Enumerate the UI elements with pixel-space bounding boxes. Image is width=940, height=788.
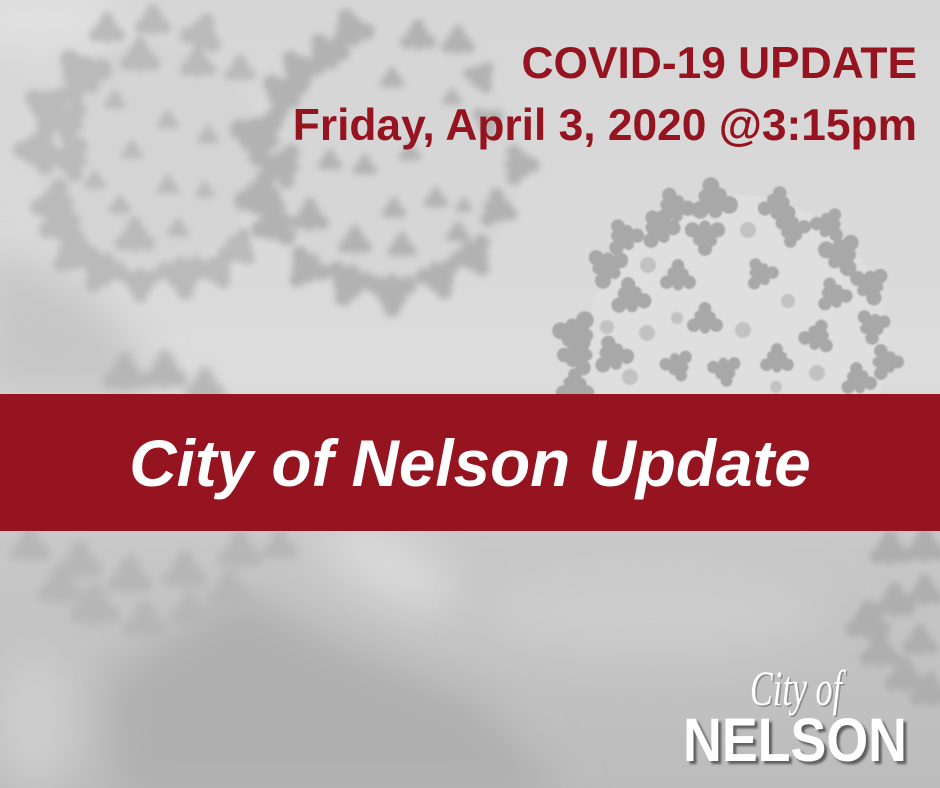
- banner: City of Nelson Update: [0, 394, 940, 531]
- logo script: City of: City of: [752, 662, 848, 718]
- heading: COVID-19 UPDATE: COVID-19 UPDATE: [522, 39, 917, 88]
- logo script: City of: City of: [750, 660, 846, 716]
- virus particle: lower left, very blurred: [11, 352, 297, 638]
- virus particle: lower right edge: [847, 528, 940, 706]
- virus particle: upper middle: [223, 3, 539, 315]
- heading: date and time: Friday, April 3, 2020 @3:15pm: [293, 101, 917, 150]
- banner title: City of Nelson Update: [129, 427, 811, 500]
- logo: City of Nelson: [683, 660, 910, 775]
- virus particle: right, small faint spikes: [600, 222, 825, 393]
- virus particle: right, in focus: [550, 175, 903, 495]
- virus particle: upper left: [15, 5, 265, 302]
